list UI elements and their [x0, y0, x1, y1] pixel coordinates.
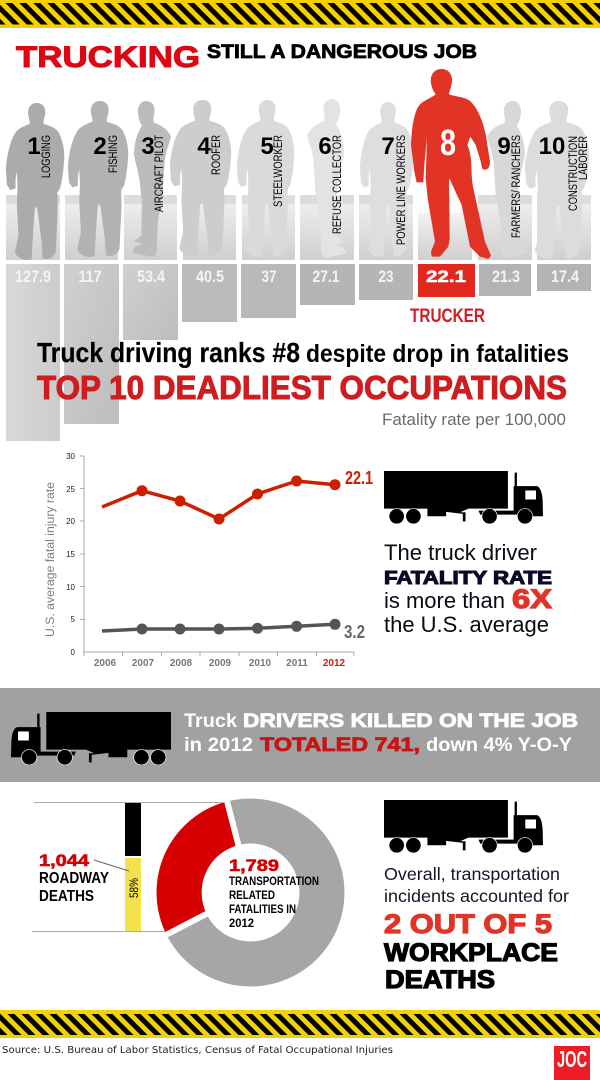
top hazard stripe	[0, 0, 600, 28]
rank numbers	[27, 122, 565, 163]
bar chart: fatality rates: 40.5	[196, 267, 224, 286]
occupation labels: POWER LINE WORKERS	[396, 135, 408, 245]
donut center label: TRANSPORTATION	[229, 874, 319, 888]
occupation labels: REFUSE COLLECTOR	[332, 135, 344, 234]
workplace deaths callout: incidents accounted for	[384, 886, 569, 906]
y axis numbers: 5	[71, 615, 76, 624]
icon: truck facing left	[11, 712, 171, 765]
x axis years: 2006	[94, 658, 117, 669]
bar chart: fatality rates: 22.1	[426, 267, 466, 286]
fatality rate callout: FATALITY RATE	[384, 568, 552, 588]
figure 6 refuse collector	[307, 99, 346, 258]
truck driver series	[102, 476, 340, 524]
icon: truck	[384, 471, 543, 524]
roadway deaths label: DEATHS	[39, 888, 94, 905]
figures: ten occupation silhouettes	[6, 69, 589, 260]
y axis numbers: 10	[66, 583, 76, 592]
banner text: Truck	[184, 710, 237, 732]
bar chart: fatality rates: 17.4	[551, 267, 579, 286]
stacked bar: roadway deaths	[32, 802, 222, 932]
figure 5 steelworker	[237, 100, 294, 257]
fatality rate callout: 6X	[512, 584, 552, 614]
occupation labels	[41, 135, 590, 245]
banner text	[184, 710, 578, 756]
x axis years: 2008	[170, 658, 193, 669]
y axis numbers	[66, 452, 76, 657]
workplace deaths callout: DEATHS	[385, 966, 495, 994]
title	[16, 41, 477, 74]
figure 8 trucker	[411, 69, 491, 259]
bar chart: fatality rates	[6, 264, 591, 441]
rank numbers: 2	[93, 133, 107, 160]
figure 1 logging	[6, 103, 64, 260]
panel: gray banner	[0, 688, 600, 782]
rank numbers: 3	[141, 133, 155, 160]
x axis years: 2010	[249, 658, 272, 669]
y axis numbers: 25	[66, 485, 76, 494]
occupation labels: AIRCRAFT PILOT	[154, 135, 166, 212]
donut center label: 1,789	[229, 856, 279, 875]
workplace deaths callout: Overall, transportation	[384, 864, 560, 884]
occupation labels: ROOFER	[211, 135, 223, 175]
axes	[80, 456, 354, 656]
bar chart: fatality rates: 53.4	[137, 267, 165, 286]
logo: JOC	[554, 1046, 590, 1080]
banner text: TOTALED 741,	[260, 735, 420, 756]
rank numbers: 7	[381, 133, 395, 160]
icon: truck	[384, 800, 543, 853]
bar chart: fatality rates: 127.9	[15, 267, 51, 286]
fatality rate callout: The truck driver	[384, 540, 537, 565]
donut center label: 2012	[229, 916, 254, 930]
rank numbers: 8	[440, 122, 456, 163]
y axis numbers: 30	[66, 452, 76, 461]
workplace deaths callout: 2 OUT OF 5	[384, 909, 552, 939]
x axis years	[94, 658, 346, 669]
workplace deaths callout	[384, 864, 569, 994]
occupation labels: CONSTRUCTION	[568, 136, 580, 211]
fatality rate callout: the U.S. average	[384, 612, 549, 637]
rank numbers: 5	[260, 133, 274, 160]
us average series	[102, 619, 340, 634]
figure 7 power line workers	[360, 102, 413, 257]
bar chart: fatality rates: 117	[78, 267, 102, 286]
roadway deaths label: ROADWAY	[39, 870, 109, 887]
donut center label: FATALITIES IN	[229, 902, 296, 916]
y axis title: U.S. average fatal injury rate	[45, 482, 57, 637]
banner text: in 2012	[184, 734, 253, 756]
occupation labels: LOGGING	[41, 135, 53, 178]
pedestal backgrounds	[6, 195, 591, 260]
value 22.1: 22.1	[345, 468, 373, 488]
y axis numbers: 15	[66, 550, 76, 559]
donut chart	[157, 795, 322, 964]
rank numbers: 9	[497, 133, 511, 160]
line chart	[45, 452, 373, 669]
source line: Source: U.S. Bureau of Labor Statistics, Census of Fatal Occupational Injuries	[2, 1045, 393, 1056]
x axis years: 2007	[132, 658, 155, 669]
figure 2 fishing	[68, 101, 128, 257]
fatality rate callout	[384, 540, 552, 637]
x axis years: 2011	[286, 658, 308, 669]
figure 4 roofer	[170, 100, 231, 256]
figure 3 aircraft pilot	[132, 101, 171, 257]
roadway deaths label: 1,044	[39, 851, 90, 870]
banner text: down 4% Y-O-Y	[426, 734, 572, 756]
x axis years: 2012	[323, 658, 346, 669]
figure 10 construction laborer	[525, 101, 589, 259]
y axis numbers: 0	[71, 648, 76, 657]
main headline: Truck driving ranks #8	[37, 337, 300, 368]
trucker label: TRUCKER	[410, 306, 485, 327]
occupation labels: STEELWORKER	[273, 135, 285, 207]
banner text: DRIVERS KILLED ON THE JOB	[243, 711, 578, 732]
y axis numbers: 20	[66, 517, 76, 526]
occupation labels: FARMERS/ RANCHERS	[511, 135, 523, 238]
occupation labels: LABORER	[578, 136, 590, 180]
title: STILL A DANGEROUS JOB	[207, 41, 477, 63]
figure 9 farmers	[487, 101, 527, 258]
workplace deaths callout: WORKPLACE	[384, 939, 558, 967]
value 3.2: 3.2	[344, 622, 365, 642]
rank numbers: 1	[27, 133, 41, 160]
fatality rate callout: is more than	[384, 588, 505, 613]
bar chart: fatality rates: 27.1	[312, 267, 340, 286]
stacked bar: roadway deaths: 58%	[129, 878, 141, 898]
donut center label: RELATED	[229, 888, 275, 902]
donut center label	[229, 856, 319, 930]
rank numbers: 10	[539, 133, 565, 160]
main headline: TOP 10 DEADLIEST OCCUPATIONS	[37, 369, 567, 406]
main headline	[37, 337, 569, 429]
main headline: Fatality rate per 100,000	[382, 410, 566, 429]
bottom hazard stripe	[0, 1010, 600, 1038]
bar chart: fatality rates: 37	[262, 267, 276, 286]
rank numbers: 6	[318, 133, 332, 160]
main headline: despite drop in fatalities	[306, 340, 569, 368]
bar chart: fatality rates: 21.3	[492, 267, 520, 286]
rank numbers: 4	[197, 133, 211, 160]
roadway deaths label	[39, 851, 109, 905]
bar chart: fatality rates: 23	[378, 267, 394, 286]
occupation labels: FISHING	[108, 135, 120, 173]
x axis years: 2009	[209, 658, 232, 669]
title: TRUCKING	[16, 41, 200, 74]
